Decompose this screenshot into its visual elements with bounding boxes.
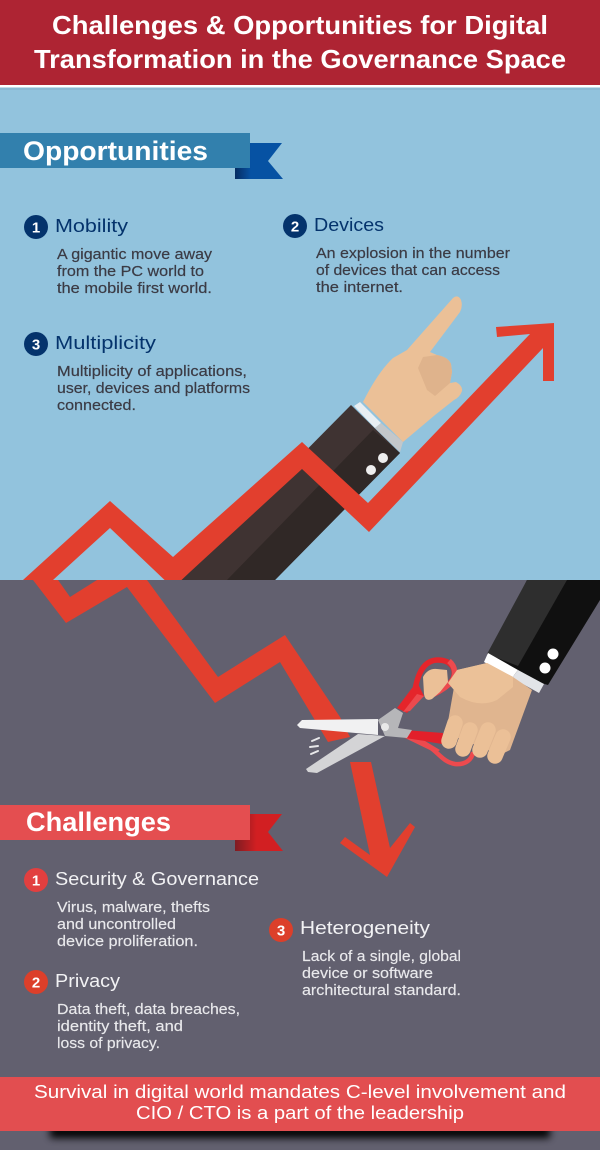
opportunity 3: Multiplicity: 3 (32, 336, 40, 354)
challenge 3: Heterogeneity: 3 (277, 922, 285, 940)
title banner (0, 0, 600, 90)
challenge 2: Privacy: 2 (32, 974, 40, 992)
opportunity 3: Multiplicity: connected. (57, 398, 136, 414)
scissors (297, 660, 473, 773)
footer text: Survival in digital world mandates C-level involvement and (34, 1082, 566, 1102)
challenge 1: Security & Governance: Virus, malware, thefts (57, 900, 210, 916)
opportunity 2: Devices: An explosion in the number (316, 246, 510, 262)
opportunity 2: Devices: 2 (291, 218, 299, 236)
challenge 3: Heterogeneity: Heterogeneity (300, 917, 431, 938)
opportunity 1: Mobility: A gigantic move away (57, 247, 213, 263)
ribbon heading: Challenges: Challenges (26, 807, 171, 837)
illustration: pointing hand in suit sleeve (178, 296, 462, 580)
challenge 1: Security & Governance (24, 868, 259, 950)
footer banner (0, 1077, 600, 1138)
challenge 3: Heterogeneity (269, 917, 461, 999)
ribbon heading: Opportunities (0, 133, 283, 179)
challenge 1: Security & Governance: device proliferation. (57, 934, 198, 950)
opportunity 1: Mobility: the mobile first world. (57, 281, 212, 297)
footer text (34, 1082, 566, 1123)
ribbon heading: Challenges (0, 805, 283, 851)
chart: falling red arrow, cut (33, 580, 415, 877)
challenge 2: Privacy: Data theft, data breaches, (57, 1002, 240, 1018)
panel: opportunities background (0, 85, 600, 580)
challenge 1: Security & Governance: and uncontrolled (57, 917, 176, 933)
opportunity 1: Mobility: from the PC world to (57, 264, 204, 280)
challenge 2: Privacy: loss of privacy. (57, 1036, 160, 1052)
challenge 1: Security & Governance: 1 (32, 872, 40, 890)
opportunity 2: Devices: the internet. (316, 280, 403, 296)
opportunity 2: Devices: of devices that can access (316, 263, 500, 279)
opportunity 1: Mobility: Mobility (55, 215, 129, 236)
challenge 3: Heterogeneity: architectural standard. (302, 983, 461, 999)
challenge 3: Heterogeneity: device or software (302, 966, 433, 982)
title text: Challenges & Opportunities for Digital (52, 10, 548, 40)
ribbon heading: Opportunities: Opportunities (23, 136, 208, 166)
opportunity 1: Mobility: 1 (32, 220, 40, 236)
challenge 2: Privacy (24, 970, 240, 1052)
opportunity 3: Multiplicity: Multiplicity of applications, (57, 364, 247, 380)
title text (34, 10, 566, 74)
opportunity 2: Devices (283, 214, 510, 296)
illustration: hand with scissors (297, 580, 600, 773)
challenge 2: Privacy: identity theft, and (57, 1019, 183, 1035)
hand (423, 663, 532, 756)
opportunity 3: Multiplicity (24, 332, 250, 414)
footer text: CIO / CTO is a part of the leadership (136, 1103, 464, 1123)
chart: rising red arrow (23, 323, 554, 588)
challenge 1: Security & Governance: Security & Governance (55, 868, 259, 889)
opportunity 1: Mobility (24, 215, 213, 297)
opportunity 2: Devices: Devices (314, 214, 384, 235)
challenge 3: Heterogeneity: Lack of a single, global (302, 949, 461, 965)
opportunity 3: Multiplicity: user, devices and platforms (57, 381, 250, 397)
title text: Transformation in the Governance Space (34, 44, 566, 74)
challenge 2: Privacy: Privacy (55, 970, 121, 991)
opportunity 3: Multiplicity: Multiplicity (55, 332, 157, 353)
panel: challenges background (0, 580, 600, 1150)
